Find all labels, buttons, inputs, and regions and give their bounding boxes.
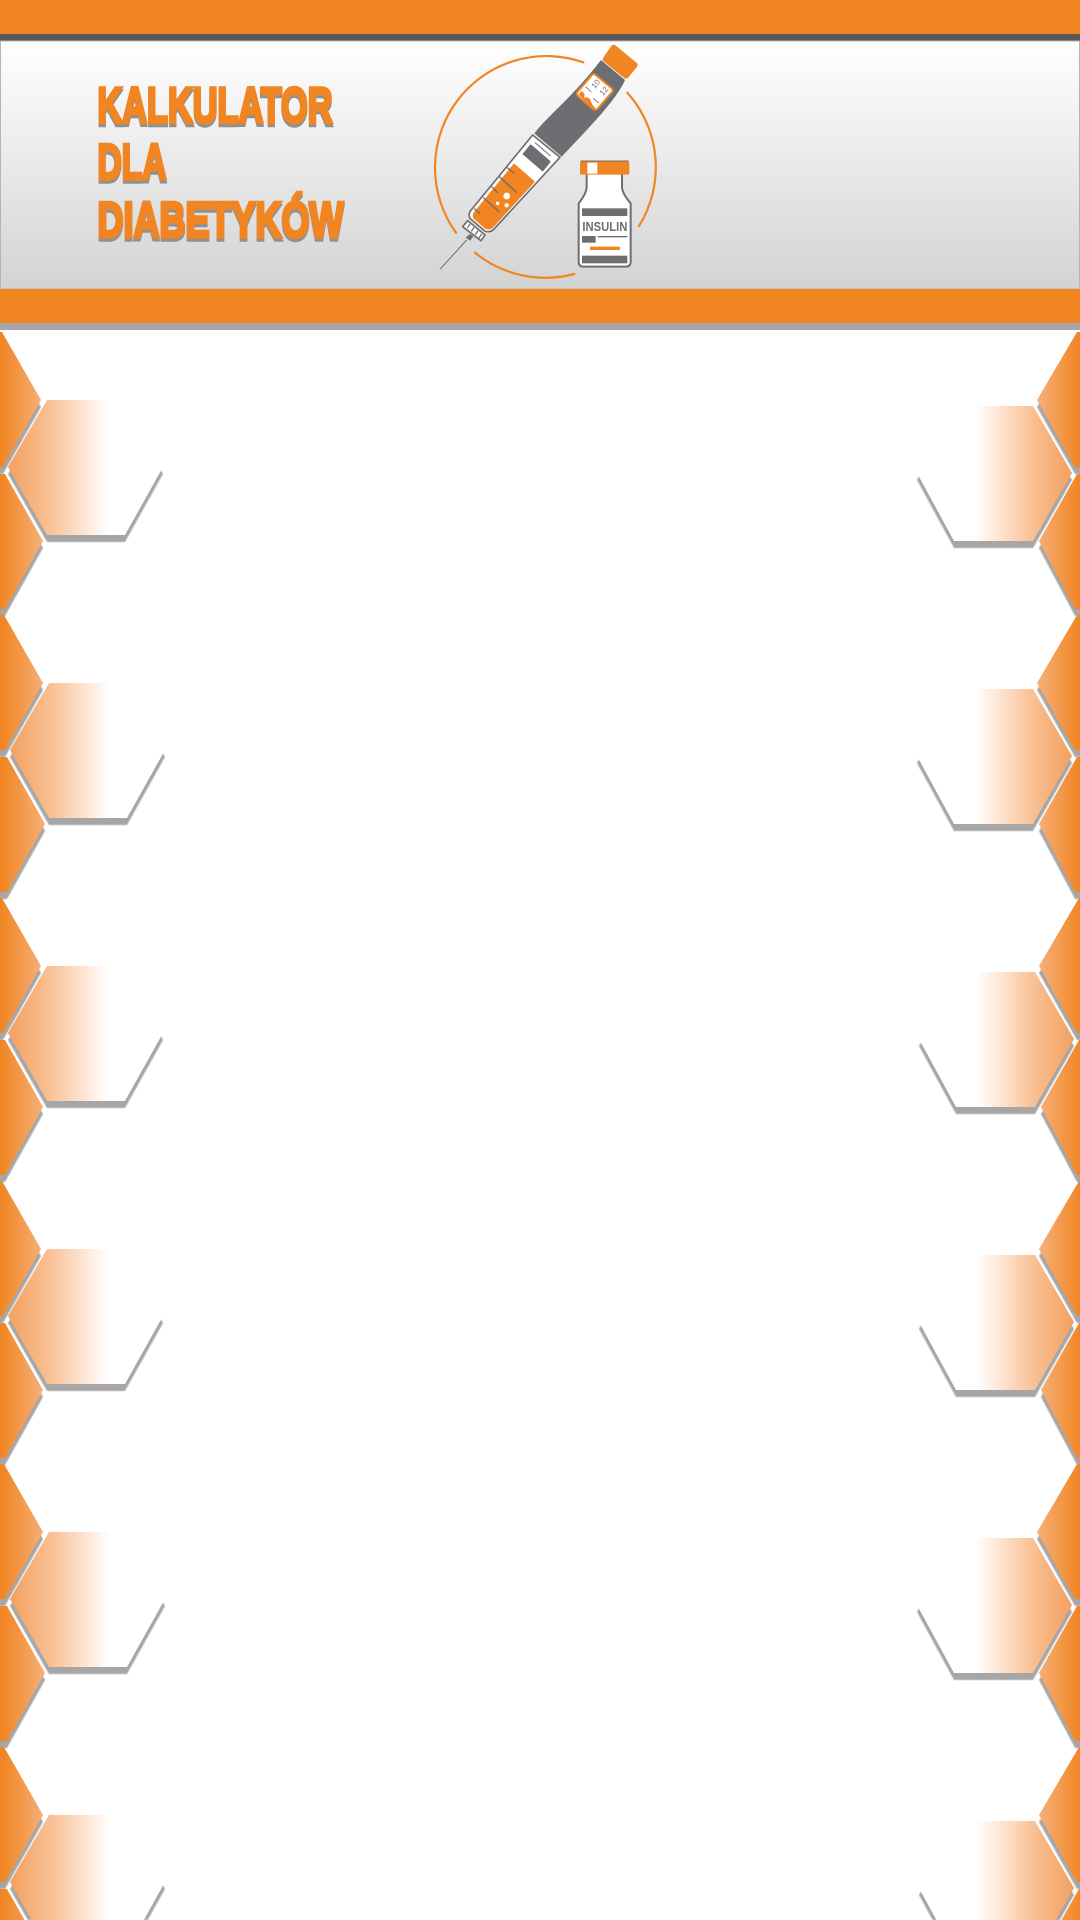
icon: insulin pen	[440, 47, 635, 269]
left hexagon row 4	[0, 1181, 163, 1465]
top orange band	[0, 0, 1080, 34]
title line 1: KALKULATOR	[98, 78, 332, 134]
pen cap	[605, 47, 635, 76]
vial cap	[580, 161, 629, 175]
cartridge	[469, 135, 560, 232]
lower grey band	[0, 323, 1080, 330]
lower orange band	[0, 289, 1080, 323]
right hexagon row 2	[917, 615, 1080, 899]
header gradient background	[0, 41, 1080, 289]
icon: insulin vial	[579, 161, 631, 267]
vial body	[579, 173, 631, 267]
left hexagon row 1	[0, 332, 163, 616]
vial top band	[582, 208, 627, 216]
pen body	[534, 60, 625, 157]
vial orange bar	[590, 247, 620, 250]
title line 3: DIABETYKÓW	[98, 192, 344, 248]
vial bottom band	[582, 256, 627, 263]
vial small block and line	[582, 236, 627, 243]
right hexagon row 5	[917, 1464, 1080, 1748]
left hexagon row 5	[0, 1464, 165, 1748]
left hexagon row 6	[0, 1747, 165, 1920]
right hexagon row 6	[919, 1747, 1080, 1920]
title	[98, 78, 344, 248]
cartridge insulin fill	[473, 163, 535, 230]
left hexagon row 3	[0, 898, 163, 1182]
dose window	[577, 74, 613, 110]
right hexagon row 3	[919, 898, 1080, 1182]
left hexagon row 2	[0, 615, 165, 899]
right hexagon row 4	[919, 1181, 1080, 1465]
icon: insulin pen and vial	[435, 47, 656, 278]
pen needle	[440, 240, 467, 269]
dark grey band	[0, 34, 1080, 41]
needle hub	[463, 221, 485, 241]
bubbles	[496, 193, 510, 207]
header panel	[0, 0, 1080, 330]
vial label text: INSULIN	[582, 219, 627, 234]
dose window: 12	[598, 84, 611, 97]
icon: circle arcs	[435, 56, 656, 278]
right hexagon row 1	[917, 332, 1080, 616]
scale ticks	[474, 168, 517, 214]
title line 2: DLA	[98, 134, 166, 190]
dose window: 10	[589, 77, 602, 90]
cartridge label	[523, 145, 550, 171]
